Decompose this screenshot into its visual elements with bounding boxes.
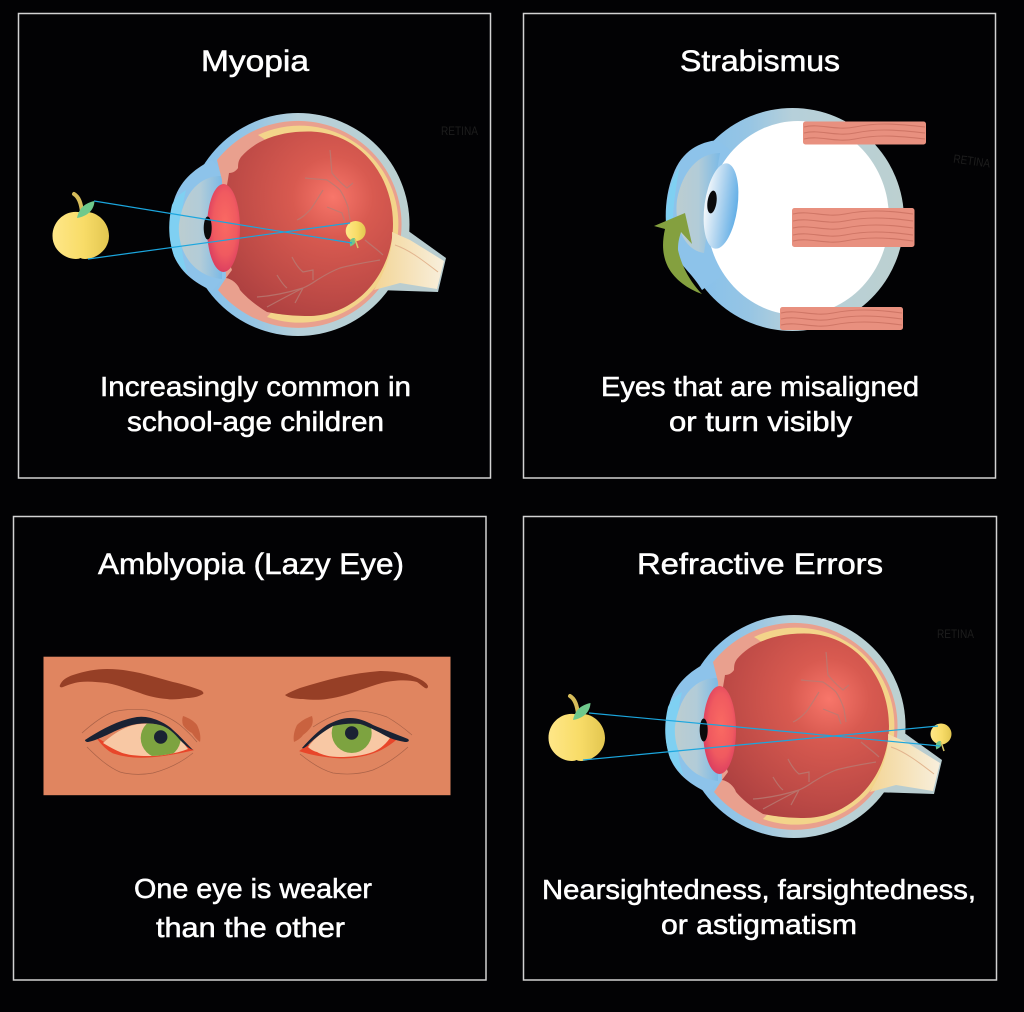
diagram: refractive eye <box>665 615 942 838</box>
left eyebrow <box>60 669 203 699</box>
heading: Strabismus: Strabismus <box>680 45 840 78</box>
panel frame: refractive errors <box>524 516 996 980</box>
optic nerve <box>870 734 940 792</box>
text: refractive errors description: Nearsightedness, farsightedness, <box>542 874 976 905</box>
panel frame: amblyopia <box>14 516 486 980</box>
watermark: retina: RETINA <box>952 152 991 171</box>
right eyebrow <box>285 671 428 700</box>
heading: Amblyopia (Lazy Eye): Amblyopia (Lazy Eye) <box>98 548 404 581</box>
text: refractive errors description: or astigmatism <box>661 909 857 940</box>
muscle: top <box>803 122 926 144</box>
text: myopia description: school-age children <box>127 406 384 437</box>
diagram: strabismus eye <box>666 108 926 331</box>
blood vessels <box>257 150 383 307</box>
left eye <box>82 709 200 774</box>
icon: apple <box>548 696 605 761</box>
text: strabismus description <box>601 371 919 437</box>
panel: refractive errors <box>524 516 996 980</box>
light rays <box>583 713 940 760</box>
watermark: retina: RETINA <box>937 627 974 641</box>
icon: apple <box>52 194 109 259</box>
panel: amblyopia <box>14 516 486 980</box>
text: myopia description: Increasingly common in <box>100 371 411 402</box>
text: myopia description <box>100 371 411 437</box>
diagram: myopia eye <box>169 113 446 336</box>
text: amblyopia description <box>134 873 372 943</box>
panel: strabismus <box>524 14 996 478</box>
inverted image <box>930 724 952 751</box>
text: strabismus description: Eyes that are misaligned <box>601 371 919 402</box>
panel: myopia <box>18 14 490 478</box>
text: amblyopia description: than the other <box>156 912 345 943</box>
heading: Myopia: Myopia <box>201 45 309 78</box>
arrow: eye turn <box>654 213 702 294</box>
text: strabismus description: or turn visibly <box>669 406 852 437</box>
light rays <box>88 201 352 259</box>
muscle: middle <box>792 208 914 247</box>
illustration: face with eyes <box>44 657 450 795</box>
optic nerve <box>374 232 444 290</box>
watermark: retina: RETINA <box>441 124 478 138</box>
heading: Refractive Errors: Refractive Errors <box>637 548 883 581</box>
panel frame: myopia <box>18 14 490 478</box>
panel frame: strabismus <box>524 14 996 478</box>
blood vessels <box>753 652 879 809</box>
text: refractive errors description <box>542 874 976 940</box>
inverted image <box>346 221 366 241</box>
right eye <box>294 711 412 774</box>
lens and pupil <box>699 161 743 251</box>
muscle: bottom <box>780 307 903 330</box>
text: amblyopia description: One eye is weaker <box>134 873 372 904</box>
